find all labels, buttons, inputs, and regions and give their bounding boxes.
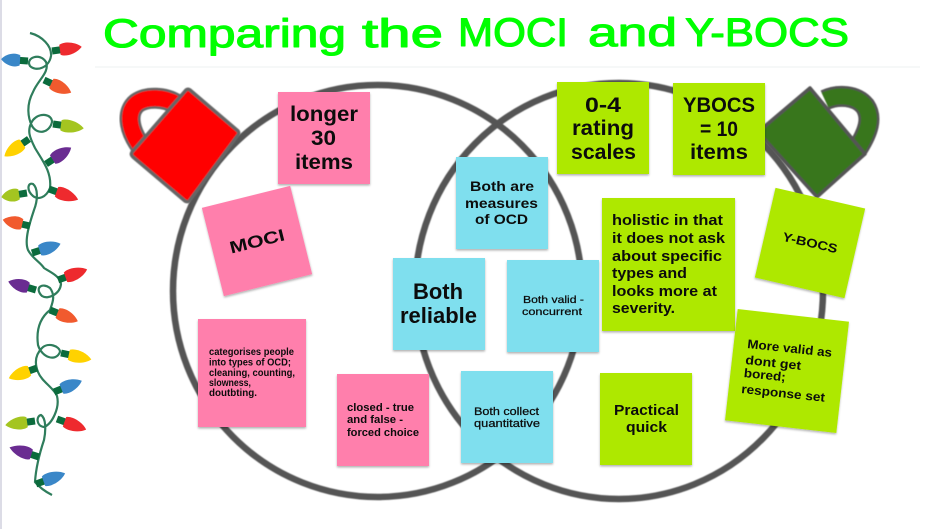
sticky: 0-4 rating scales (557, 82, 649, 174)
sticky: practical quick (600, 373, 692, 465)
sticky: longer 30 items: longer (290, 103, 358, 126)
sticky: more valid: More valid as (747, 337, 833, 360)
sticky: longer 30 items: 30 (311, 127, 336, 150)
sticky: holistic: it does not ask (612, 230, 726, 247)
title: Y-BOCS (685, 11, 849, 55)
sticky: categorises: doutbting. (209, 388, 257, 399)
sticky: holistic: severity. (612, 300, 675, 317)
icon: green mug (758, 88, 869, 197)
sticky: 0-4 rating scales: scales (571, 141, 636, 164)
venn diagram circles (173, 83, 823, 499)
sticky: YBOCS 10 items (673, 83, 765, 175)
sticky: closed true false: and false - (347, 414, 403, 426)
sticky: MOCI: MOCI (228, 225, 287, 257)
sticky: Y-BOCS: Y-BOCS (781, 230, 839, 256)
sticky: categorises: categorises people (209, 347, 294, 358)
sticky: more valid: response set (741, 382, 827, 405)
sticky: both reliable (393, 258, 485, 350)
title: the (362, 12, 443, 56)
sticky: holistic: holistic in that (612, 212, 723, 229)
sticky: longer 30 items: items (295, 151, 353, 174)
sticky: both reliable: reliable (400, 303, 477, 328)
sticky: both collect quantitative (461, 371, 553, 463)
sticky: holistic: types and (612, 265, 687, 282)
sticky: YBOCS 10 items: items (690, 141, 748, 164)
sticky: closed true false: forced choice (347, 427, 419, 439)
sticky: both are measures of OCD: measures (465, 195, 538, 211)
sticky: both valid concurrent: concurrent (522, 306, 582, 318)
sticky: practical quick: Practical (614, 402, 679, 419)
title: Comparing (103, 12, 346, 56)
sticky: categorises: into types of OCD; (209, 358, 291, 368)
sticky: YBOCS 10 items: YBOCS (683, 94, 755, 117)
sticky: 0-4 rating scales: rating (572, 117, 634, 140)
sticky: both collect quantitative: quantitative (474, 418, 540, 430)
title: and (588, 11, 677, 55)
sticky: longer 30 items (278, 92, 370, 184)
sticky: YBOCS 10 items: = 10 (700, 118, 738, 141)
title (103, 11, 849, 56)
sticky: both valid concurrent: Both valid - (523, 294, 585, 306)
sticky: both are measures of OCD: of OCD (475, 211, 528, 227)
sticky: MOCI (202, 186, 312, 296)
sticky: holistic: looks more at (612, 283, 717, 300)
sticky: both valid concurrent (507, 260, 599, 352)
title: MOCI (458, 11, 568, 55)
sticky: both reliable: Both (413, 279, 463, 304)
sticky: more valid: dont get (745, 353, 803, 373)
sticky: 0-4 rating scales: 0-4 (585, 94, 621, 117)
sticky: both are measures of OCD: Both are (470, 178, 534, 194)
sticky: more valid: bored; (743, 366, 786, 384)
icon: string of Christmas lights (0, 33, 93, 495)
sticky: holistic: about specific (612, 248, 722, 265)
sticky: categorises: slowness, (209, 378, 251, 389)
icon: red mug (130, 89, 239, 202)
sticky: both are measures of OCD (456, 157, 548, 249)
sticky: both collect quantitative: Both collect (474, 406, 539, 418)
sticky: Y-BOCS (755, 188, 865, 298)
sticky: holistic (602, 198, 735, 331)
sticky: closed true false: closed - true (347, 402, 414, 414)
sticky: closed true false (337, 374, 429, 466)
sticky: practical quick: quick (626, 419, 668, 436)
sticky: more valid (725, 309, 849, 433)
sticky: categorises (198, 319, 306, 427)
sticky: categorises: cleaning, counting, (209, 368, 295, 379)
